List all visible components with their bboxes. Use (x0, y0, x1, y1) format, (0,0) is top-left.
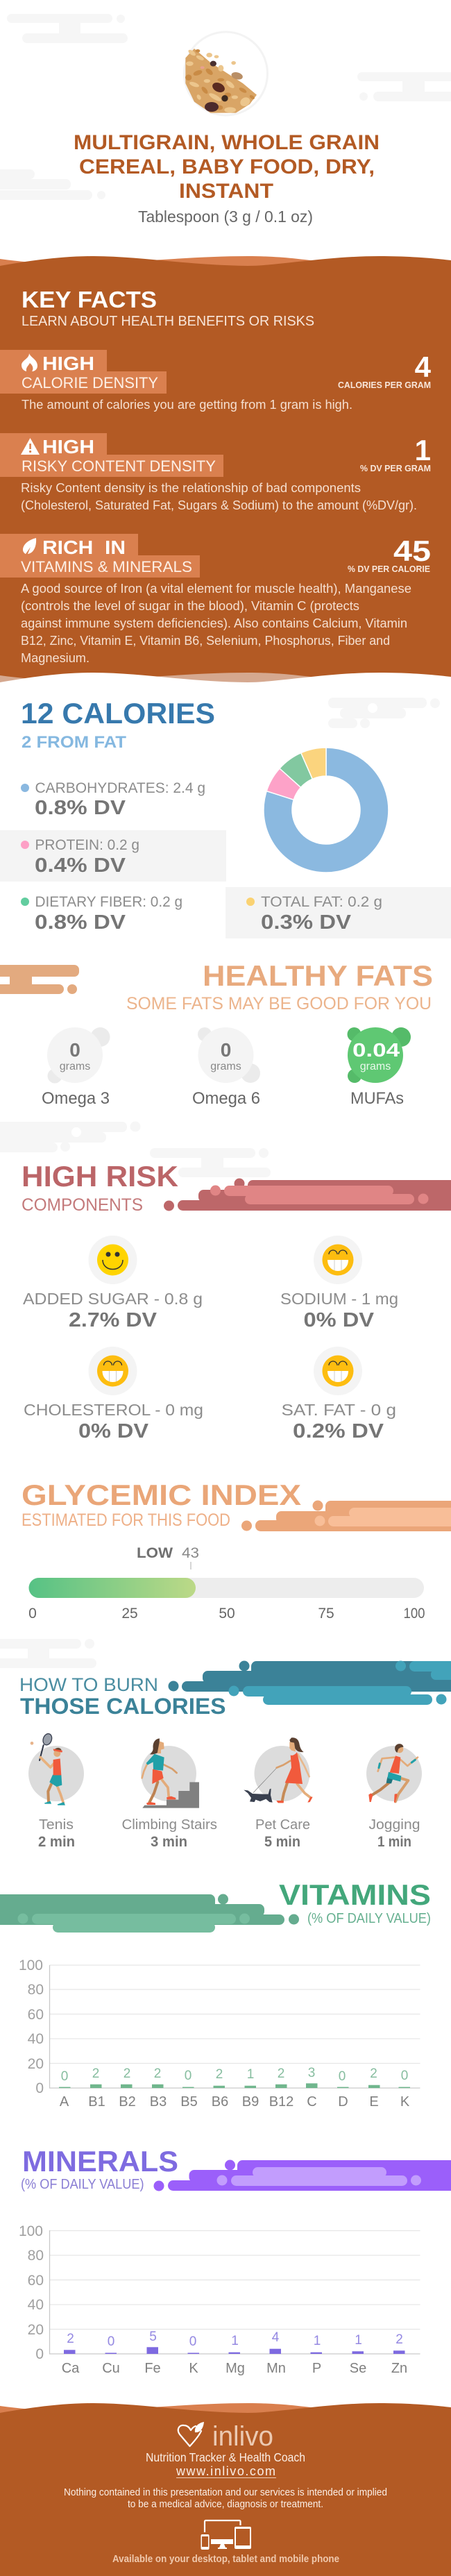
risk: sodium: SODIUM - 1 mg (280, 1290, 398, 1308)
fact: rich in vitamins and minerals (0, 534, 431, 665)
icon: inlivo heart and leaf logo (178, 2422, 204, 2446)
risk: added sugar (23, 1236, 203, 1331)
gauge scale (28, 1606, 425, 1622)
legend: dietary fiber: 0.8% DV (35, 911, 126, 934)
fact: calorie density: 4 (415, 351, 432, 383)
activity: pet care (244, 1737, 313, 1803)
bar chart: vitamins: 3 (308, 2066, 315, 2080)
bar chart: vitamins: K (400, 2094, 410, 2110)
bar chart: vitamins: B5 (180, 2094, 198, 2110)
bar chart: vitamins: 2 (154, 2066, 161, 2081)
heading: minerals: MINERALS (22, 2145, 178, 2178)
fact: calorie density (0, 350, 432, 412)
activity labels: Pet Care (255, 1817, 310, 1833)
subheading: components: COMPONENTS (22, 1195, 143, 1215)
decoration: burn blob (168, 1660, 451, 1705)
bar chart: minerals: 2 (67, 2332, 74, 2346)
panel: how to burn calories (19, 1660, 451, 1850)
bar chart: vitamins: 2 (92, 2066, 99, 2081)
logo wordmark: inlivo (212, 2421, 273, 2452)
activity: climbing stairs (141, 1738, 199, 1808)
gauge scale: 50 (219, 1606, 235, 1622)
bar chart: minerals: P (312, 2361, 321, 2376)
legend: total fat (226, 887, 451, 938)
bar chart: vitamins: B2 (119, 2094, 136, 2110)
fact: risky content density: (Cholesterol, Saturated Fat, Sugars & Sodium) to the amount (%DV/gr). (21, 498, 417, 512)
bar chart: minerals: 40 (28, 2297, 44, 2313)
risk: saturated fat: SAT. FAT - 0 g (282, 1401, 396, 1419)
bar chart: minerals: 1 (355, 2333, 362, 2348)
fact: rich in vitamins and minerals: A good source of Iron (a vital element for muscle health), Manganese (21, 582, 411, 596)
fact: risky content density: Risky Content density is the relationship of bad components (21, 481, 361, 495)
stat: omega 6: Omega 6 (192, 1089, 260, 1108)
bar chart: vitamins: C (307, 2094, 317, 2110)
legend: total fat: TOTAL FAT: 0.2 g (261, 894, 382, 910)
panel: key facts (0, 256, 451, 694)
bar chart: minerals (19, 2223, 420, 2376)
bar chart: minerals: Cu (102, 2361, 120, 2376)
risk: sodium (280, 1236, 398, 1331)
activity labels: Tenis (39, 1817, 74, 1833)
bar chart: minerals: 2 (395, 2332, 403, 2347)
bar chart: minerals: 0 (189, 2334, 196, 2349)
bar chart: minerals: Ca (62, 2361, 80, 2376)
stat: omega 3: Omega 3 (42, 1089, 110, 1108)
panel: glycemic index (22, 1479, 451, 1622)
heading: key facts: LEARN ABOUT HEALTH BENEFITS OR RISKS (22, 314, 314, 329)
bar chart: minerals: Se (350, 2361, 366, 2376)
activity: jogging (366, 1744, 422, 1803)
activity labels: 1 min (377, 1834, 411, 1850)
legend: dietary fiber (21, 894, 182, 934)
fact: rich in vitamins and minerals: % DV PER CALORIE (348, 564, 430, 574)
risk: added sugar: ADDED SUGAR - 0.8 g (23, 1290, 203, 1308)
activity labels: Climbing Stairs (122, 1817, 217, 1833)
bar chart: vitamins: 60 (28, 2007, 44, 2023)
heading: key facts (22, 287, 314, 329)
fact: rich in vitamins and minerals: B12, Zinc, Vitamin E, Vitamin B6, Selenium, Phosphorus, Fiber and (21, 634, 390, 648)
tagline: Nutrition Tracker & Health Coach (146, 2450, 305, 2464)
activity labels: Jogging (369, 1817, 420, 1833)
bar chart: vitamins: 20 (28, 2056, 44, 2072)
legend: protein (0, 830, 226, 882)
decoration: minerals blob (154, 2160, 451, 2191)
gauge value: 43 (182, 1545, 199, 1561)
fact: rich in vitamins and minerals: RICH IN (42, 537, 126, 558)
bar chart: vitamins: 100 (19, 1958, 43, 1973)
bar chart: minerals: 1 (231, 2334, 239, 2348)
risk: cholesterol: 0% DV (78, 1420, 149, 1442)
bar chart: vitamins: B9 (242, 2094, 259, 2110)
title (74, 131, 380, 203)
activity: tennis (28, 1733, 84, 1805)
activity labels (38, 1817, 420, 1850)
bar chart: vitamins: B12 (269, 2094, 293, 2110)
panel: healthy fats (0, 959, 433, 1108)
panel: calories (0, 697, 451, 938)
fact: rich in vitamins and minerals: 45 (393, 534, 431, 567)
risk: added sugar: 2.7% DV (69, 1309, 158, 1331)
fact: calorie density: HIGH (42, 353, 94, 374)
bar chart: minerals: K (189, 2361, 198, 2376)
gauge value: LOW (137, 1545, 173, 1561)
decorative clouds (0, 14, 451, 1668)
bar chart: vitamins: 0 (339, 2069, 346, 2084)
risk: cholesterol (24, 1347, 203, 1442)
bar chart: vitamins: 1 (247, 2067, 254, 2082)
subheading: glycemic index: ESTIMATED FOR THIS FOOD (22, 1510, 230, 1530)
legend: dietary fiber: DIETARY FIBER: 0.2 g (35, 894, 182, 910)
fact: risky content density (0, 433, 431, 512)
bar chart: minerals: 5 (149, 2330, 157, 2344)
donut chart (264, 748, 389, 873)
activity labels: 3 min (151, 1834, 187, 1850)
stat: omega 6: grams (210, 1061, 241, 1072)
food image: granola in a circle (185, 32, 268, 115)
decoration: high risk blob (164, 1179, 451, 1211)
bar chart: vitamins: B6 (212, 2094, 228, 2110)
bar chart: vitamins: 80 (28, 1982, 44, 1998)
bar chart: minerals: Zn (391, 2361, 407, 2376)
gauge scale: 0 (28, 1606, 37, 1622)
gauge value (137, 1545, 199, 1569)
fact: risky content density: RISKY CONTENT DENSITY (22, 457, 216, 475)
bar chart: vitamins: 0 (401, 2069, 408, 2083)
heading: glycemic index: GLYCEMIC INDEX (22, 1479, 301, 1511)
bar chart: vitamins: 2 (278, 2066, 284, 2081)
panel: high risk components (22, 1160, 451, 1442)
stat: mufas (347, 1027, 411, 1108)
panel: footer (0, 2403, 451, 2576)
stat: mufas: 0.04 (352, 1039, 400, 1061)
panel: vitamins (0, 1878, 431, 2110)
title: INSTANT (179, 180, 273, 203)
gauge scale: 100 (404, 1606, 425, 1622)
bar chart: vitamins: 2 (370, 2066, 377, 2081)
fact: risky content density: 1 (415, 434, 431, 466)
risk: saturated fat: 0.2% DV (293, 1420, 384, 1442)
heading: those calories: THOSE CALORIES (20, 1694, 226, 1719)
title: MULTIGRAIN, WHOLE GRAIN (74, 131, 380, 154)
heading: high risk: HIGH RISK (22, 1160, 178, 1193)
bar chart: vitamins: B3 (150, 2094, 167, 2110)
bar chart: vitamins: D (338, 2094, 348, 2110)
bar chart: vitamins: 0 (35, 2080, 44, 2096)
decoration: vitamins blob (0, 1894, 299, 1933)
fact: rich in vitamins and minerals: against immune system deficiencies). Also contains Calcium, Vitamin (21, 616, 407, 630)
stat: omega 3: 0 (69, 1039, 80, 1061)
bar chart: vitamins: 0 (61, 2069, 68, 2084)
bar chart: minerals: 0 (108, 2334, 114, 2349)
fact: rich in vitamins and minerals: (controls the level of sugar in the blood), Vitamin C (protects (21, 599, 359, 613)
fact: calorie density: CALORIES PER GRAM (338, 380, 431, 390)
website link: www.inlivo.com (176, 2464, 275, 2478)
bar chart: minerals: 60 (28, 2273, 44, 2289)
disclaimer (64, 2486, 387, 2510)
heading: key facts: KEY FACTS (22, 287, 157, 312)
stat: omega 6 (192, 1027, 260, 1108)
heading: vitamins: VITAMINS (279, 1878, 431, 1911)
legend: protein: PROTEIN: 0.2 g (35, 837, 139, 853)
fact: risky content density: HIGH (42, 436, 94, 457)
decoration: healthy fats blob (0, 965, 79, 994)
disclaimer: to be a medical advice, diagnosis or treatment. (128, 2498, 323, 2510)
bar chart: minerals: Fe (144, 2361, 161, 2376)
gauge scale: 25 (121, 1606, 138, 1622)
stat: mufas: grams (360, 1061, 391, 1072)
gauge scale: 75 (318, 1606, 334, 1622)
bar chart: vitamins: 40 (28, 2031, 44, 2047)
decoration: glycemic blob (241, 1501, 451, 1531)
serving size: Tablespoon (3 g / 0.1 oz) (138, 208, 313, 226)
bar chart: minerals: Mn (266, 2361, 286, 2376)
bar chart: vitamins (19, 1958, 420, 2110)
availability note: Available on your desktop, tablet and mobile phone (112, 2554, 339, 2565)
title: CEREAL, BABY FOOD, DRY, (79, 155, 375, 178)
icon: desktop, tablet and phone (201, 2520, 251, 2550)
bar chart: vitamins: 0 (185, 2069, 192, 2083)
risk: sodium: 0% DV (304, 1309, 375, 1331)
disclaimer: Nothing contained in this presentation and our services is intended or implied (64, 2486, 387, 2498)
legend: carbohydrates: CARBOHYDRATES: 2.4 g (35, 780, 205, 796)
bar chart: vitamins: E (369, 2094, 379, 2110)
bar chart: minerals: 100 (19, 2223, 43, 2239)
fact: rich in vitamins and minerals: Magnesium. (21, 651, 90, 665)
heading: healthy fats: HEALTHY FATS (203, 959, 433, 992)
bar chart: minerals: 0 (35, 2346, 44, 2362)
bar chart: vitamins: 2 (216, 2067, 223, 2082)
fact: calorie density: The amount of calories you are getting from 1 gram is high. (22, 398, 352, 412)
fact: rich in vitamins and minerals: VITAMINS & MINERALS (21, 558, 192, 575)
bar chart: vitamins: A (60, 2094, 69, 2110)
fact: calorie density: CALORIE DENSITY (22, 374, 158, 392)
gauge bar (29, 1578, 424, 1598)
stat: omega 6: 0 (221, 1039, 231, 1061)
legend: total fat: 0.3% DV (261, 911, 352, 934)
legend: protein: 0.4% DV (35, 855, 126, 877)
stat: mufas: MUFAs (350, 1089, 404, 1108)
subheading: from fat: 2 FROM FAT (22, 733, 126, 752)
fact: risky content density: % DV PER GRAM (360, 463, 431, 473)
heading: how to burn: HOW TO BURN (19, 1674, 158, 1695)
bar chart: minerals: 80 (28, 2248, 44, 2264)
legend: carbohydrates: 0.8% DV (35, 797, 126, 819)
risk: cholesterol: CHOLESTEROL - 0 mg (24, 1401, 203, 1419)
bar chart: minerals: 20 (28, 2322, 44, 2338)
bar chart: vitamins: B1 (88, 2094, 105, 2110)
subheading: vitamins: (% OF DAILY VALUE) (307, 1911, 431, 1926)
subheading: healthy fats: SOME FATS MAY BE GOOD FOR YOU (126, 994, 432, 1013)
panel: minerals (19, 2145, 451, 2376)
activity labels: 5 min (264, 1834, 300, 1850)
risk: saturated fat (282, 1347, 396, 1442)
activity labels: 2 min (38, 1834, 75, 1850)
stat: omega 3 (42, 1027, 110, 1108)
stat: omega 3: grams (60, 1061, 90, 1072)
bar chart: minerals: 1 (314, 2334, 321, 2348)
bar chart: minerals: Mg (226, 2361, 245, 2376)
heading: 12 calories: 12 CALORIES (21, 697, 215, 730)
bar chart: minerals: 4 (272, 2330, 280, 2345)
bar chart: vitamins: 2 (124, 2066, 130, 2081)
legend: carbohydrates (21, 780, 205, 819)
subheading: minerals: (% OF DAILY VALUE) (21, 2177, 144, 2192)
